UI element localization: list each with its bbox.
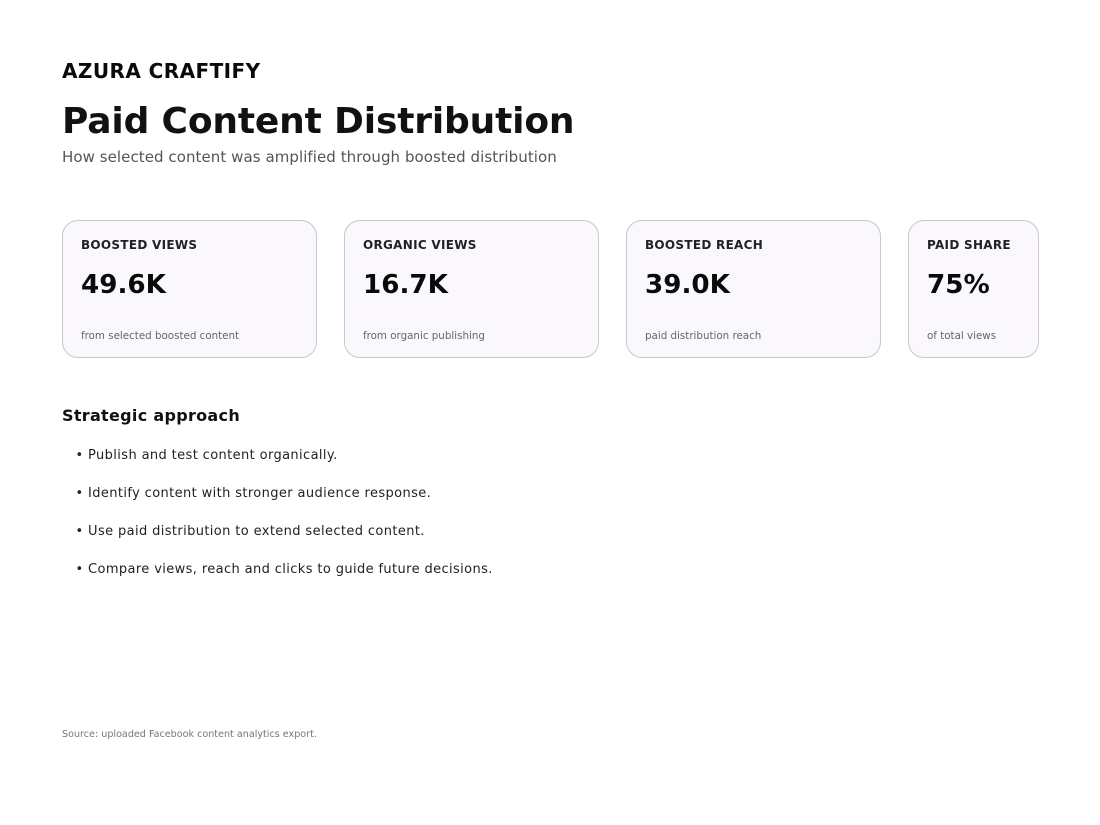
panel: boosted views: 49.6K [81, 270, 166, 300]
panel: boosted views: BOOSTED VIEWS [81, 238, 197, 252]
panel: boosted reach: BOOSTED REACH [645, 238, 763, 252]
bullet list: • Identify content with stronger audience response. [76, 486, 431, 501]
panel: organic views: ORGANIC VIEWS [363, 238, 477, 252]
panel: boosted reach: 39.0K [645, 270, 730, 300]
panel: paid share: PAID SHARE [927, 238, 1011, 252]
section heading: Strategic approach [62, 406, 240, 425]
panel: boosted views [62, 220, 317, 358]
panel: paid share: 75% [927, 270, 990, 300]
subtitle: How selected content was amplified through boosted distribution [62, 148, 557, 166]
panel: boosted reach: paid distribution reach [645, 330, 761, 342]
panel: organic views: from organic publishing [363, 330, 485, 342]
panel: organic views: 16.7K [363, 270, 448, 300]
bullet list [76, 448, 493, 577]
panel: boosted reach [626, 220, 881, 358]
bullet list: • Use paid distribution to extend selected content. [76, 524, 425, 539]
panel: paid share [908, 220, 1039, 358]
bullet list: • Compare views, reach and clicks to guide future decisions. [76, 562, 493, 577]
title: Paid Content Distribution [62, 101, 574, 142]
panel: boosted views: from selected boosted content [81, 330, 239, 342]
brand name: AZURA CRAFTIFY [62, 59, 261, 83]
source note: Source: uploaded Facebook content analytics export. [62, 729, 317, 740]
panel: organic views [344, 220, 599, 358]
bullet list: • Publish and test content organically. [76, 448, 338, 463]
panel: paid share: of total views [927, 330, 996, 342]
